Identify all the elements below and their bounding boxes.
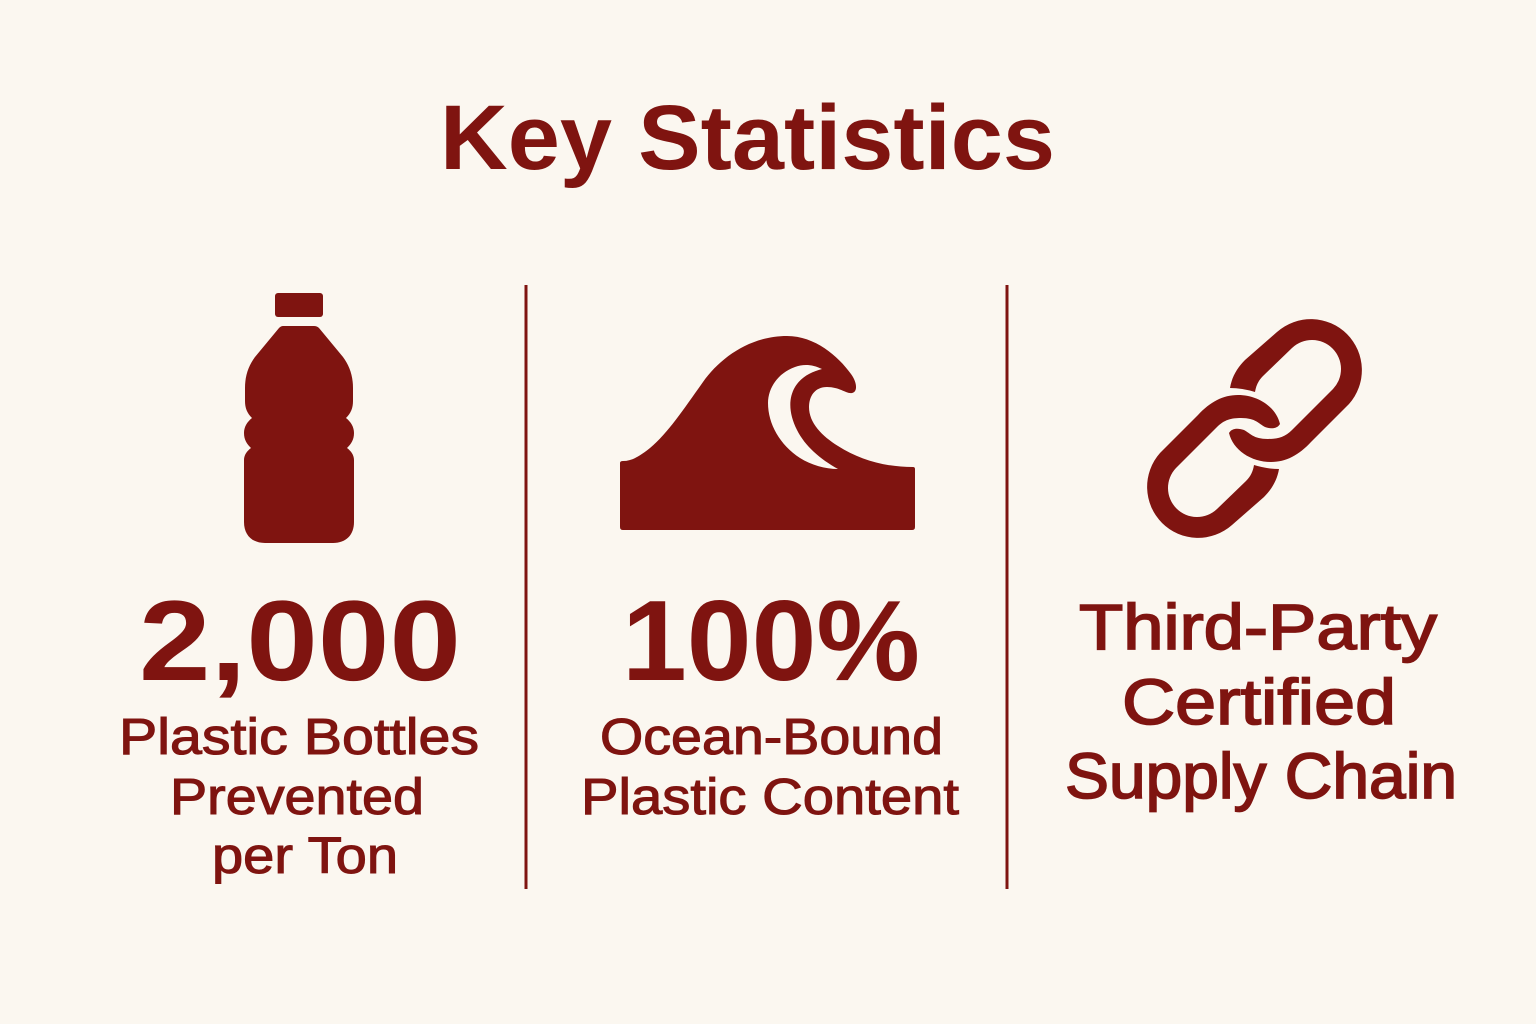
- icon: chain links: [1147, 319, 1362, 538]
- label: plastic bottles prevented per ton: Plastic Bottles: [119, 708, 479, 765]
- title: Key Statistics: [440, 87, 1055, 189]
- panel: plastic bottles: [119, 293, 479, 884]
- statistic: 2,000: 2,000: [139, 578, 461, 705]
- label: third-party certified supply chain: [1065, 591, 1457, 812]
- panel: ocean-bound plastic: [581, 336, 959, 825]
- label: plastic bottles prevented per ton: per Ton: [212, 827, 398, 884]
- label: third-party certified supply chain: Supply Chain: [1065, 740, 1457, 812]
- label: ocean-bound plastic content: Ocean-Bound: [600, 708, 943, 765]
- label: third-party certified supply chain: Third-Party: [1079, 591, 1437, 663]
- statistic: 100%: 100%: [622, 578, 920, 705]
- icon: plastic bottle: [244, 293, 354, 543]
- panel: supply chain: [1065, 319, 1457, 812]
- icon: ocean wave: [620, 336, 915, 530]
- label: ocean-bound plastic content: Plastic Content: [581, 768, 959, 825]
- label: plastic bottles prevented per ton: [119, 708, 479, 884]
- label: ocean-bound plastic content: [581, 708, 959, 825]
- label: plastic bottles prevented per ton: Prevented: [170, 768, 424, 825]
- label: third-party certified supply chain: Certified: [1122, 666, 1396, 738]
